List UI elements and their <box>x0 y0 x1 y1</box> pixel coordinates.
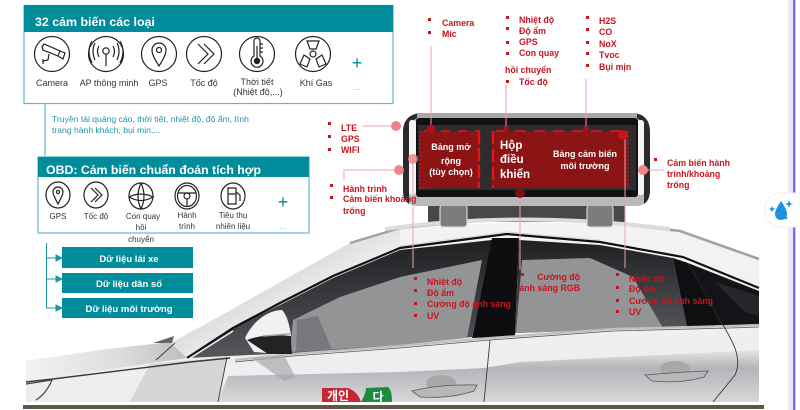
belt line <box>235 325 759 360</box>
icon: GPS pin <box>142 36 176 72</box>
A pillar <box>172 228 400 358</box>
OBD labels: Tốc độ <box>84 212 109 221</box>
icon: gas radiation <box>296 36 330 72</box>
icon: speed <box>84 182 108 208</box>
callout: window right: Cường độ ánh sáng <box>629 296 713 306</box>
car body <box>26 222 759 402</box>
callout: environment list: hồi chuyển <box>505 65 551 75</box>
callout: trip and distance left: Cảm biến khoảng <box>343 194 416 204</box>
OBD labels: GPS <box>50 212 66 221</box>
icon: camera <box>34 36 70 72</box>
wiper <box>153 336 174 343</box>
callout: connectivity: LTE <box>341 123 357 133</box>
callout: trip and distance left <box>330 184 416 216</box>
callout: gas list: CO <box>599 27 612 37</box>
display panel: expansion: rộng <box>441 156 461 166</box>
callout: gas list: NoX <box>599 39 617 49</box>
door seams <box>156 325 738 402</box>
callout: window right: Nhiệt độ <box>629 274 665 284</box>
callout: camera mic <box>428 18 474 39</box>
callout: environment list: Con quay <box>519 48 559 58</box>
taxi logo: 다 <box>372 389 384 404</box>
OBD labels: hồi <box>136 223 147 232</box>
callout: trip and distance left: Hành trình <box>343 184 387 194</box>
callout: trip and distance right: trống <box>667 180 689 190</box>
description text: Truyền tải quảng cáo, thời tiết, nhiệt độ, độ ẩm, tình <box>52 114 249 124</box>
panel: 32 sensors <box>24 5 393 104</box>
icon: GPS <box>46 182 70 208</box>
callout: window left: Nhiệt độ <box>427 277 463 287</box>
icon: thermometer <box>240 36 274 72</box>
display panel: expansion: (tùy chọn) <box>429 167 473 177</box>
plus more: + <box>352 53 362 73</box>
taxi logo <box>322 387 392 404</box>
rear window <box>515 240 687 333</box>
icon: gyroscope <box>129 183 153 209</box>
plus more: + <box>278 192 288 212</box>
display panel: controller and environment sensors: Hộp <box>500 140 522 152</box>
callout: trip and distance right <box>654 158 730 190</box>
OBD labels: trình <box>179 222 195 231</box>
OBD labels: Tiêu thụ <box>219 211 247 220</box>
panel heading: 32 cảm biến các loại <box>35 15 155 29</box>
B pillar <box>472 238 519 338</box>
callout: trip and distance right: Cảm biến hành <box>667 158 730 168</box>
OBD labels: Hành <box>177 211 197 220</box>
icon labels: Camera <box>36 78 68 88</box>
description text: trạng hành khách, bụi mịn,... <box>52 125 160 135</box>
data bar: driving <box>62 247 193 268</box>
icon labels: (Nhiệt độ,...) <box>233 87 283 97</box>
rear door handle <box>645 361 708 382</box>
icon labels: Thời tiết <box>241 77 274 87</box>
icon: steering wheel <box>175 183 199 209</box>
panel: OBD <box>38 157 309 244</box>
mirror shadow <box>252 355 296 381</box>
callout: window right: Độ ẩm <box>629 284 656 294</box>
device mounts <box>385 205 670 231</box>
rear window grey reflection <box>516 258 663 333</box>
display panel: controller and environment sensors: môi trường <box>561 161 609 171</box>
icon: speed <box>186 36 222 72</box>
OBD heading: OBD: Cảm biến chuẩn đoán tích hợp <box>46 163 261 177</box>
icon labels: Tốc độ <box>190 78 218 88</box>
callout: environment list: Tốc độ <box>519 77 548 87</box>
quarter window <box>688 263 759 325</box>
description text <box>52 114 249 135</box>
data bar: environment: Dữ liệu môi trường <box>85 304 173 315</box>
callout: environment list <box>505 15 559 87</box>
icon labels: AP thông minh <box>80 78 138 88</box>
data bar: population <box>62 273 193 293</box>
mirror <box>245 310 292 354</box>
hood shading <box>26 342 187 382</box>
callout: gas list: H2S <box>599 16 616 26</box>
seat shadow <box>296 316 332 352</box>
callout: window centre <box>519 272 581 293</box>
display panel: controller and environment sensors: Bảng cảm biến <box>553 149 617 159</box>
roof display device <box>385 113 670 231</box>
callout: gas list: Bụi mịn <box>599 62 631 72</box>
panel heading <box>24 5 393 32</box>
taxi logo: 개인 <box>327 389 349 403</box>
connector arrows to data bars <box>46 243 62 311</box>
callout: window right: UV <box>629 307 641 317</box>
display panel: controller and environment sensors <box>492 131 628 188</box>
callout: window left: Cường độ ánh sáng <box>427 299 511 309</box>
display panel: controller and environment sensors: khiển <box>500 169 530 181</box>
data bar: driving: Dữ liệu lái xe <box>99 254 159 265</box>
OBD heading <box>38 157 309 177</box>
callout lines and dots <box>344 46 664 270</box>
display panel: controller and environment sensors: điều <box>500 154 524 166</box>
callout: connectivity: WIFI <box>341 145 360 155</box>
OBD labels: Con quay <box>126 212 160 221</box>
callout: window left: Độ ẩm <box>427 288 454 298</box>
front window <box>187 240 492 358</box>
icon: fuel <box>221 183 245 209</box>
data bar: environment <box>62 298 193 318</box>
right edge scroll strip <box>788 0 795 410</box>
OBD labels: nhiên liệu <box>216 222 250 231</box>
hood line and headlamp <box>26 358 230 382</box>
plus more: ... <box>354 83 360 92</box>
connector: panel to OBD <box>44 103 46 157</box>
callout: gas list <box>586 16 631 72</box>
car illustration <box>26 222 759 404</box>
callout: environment list: Độ ẩm <box>519 26 546 36</box>
window chrome <box>187 234 759 358</box>
plus more <box>352 53 362 92</box>
callout: window centre: Cường độ <box>537 272 581 282</box>
icon labels <box>36 77 333 97</box>
callout: window left: UV <box>427 311 439 321</box>
callout: camera mic: Mic <box>442 29 457 39</box>
callout: camera mic: Camera <box>442 18 474 28</box>
bottom dark strip <box>23 405 764 409</box>
icon: smart AP <box>88 36 124 72</box>
plus more <box>278 192 288 231</box>
OBD labels: chuyển <box>128 235 154 244</box>
callout: connectivity: GPS <box>341 134 360 144</box>
door shading <box>218 350 759 402</box>
callout: connectivity <box>328 122 360 155</box>
C pillar <box>673 258 722 327</box>
icon labels: GPS <box>148 78 168 88</box>
callout: window centre: ánh sáng RGB <box>519 283 580 293</box>
front door handle <box>412 375 477 397</box>
icon: droplet widget <box>765 193 800 227</box>
display panel: expansion <box>420 131 480 188</box>
callout: window right <box>616 273 713 317</box>
callout: environment list: Nhiệt độ <box>519 15 555 25</box>
icon labels: Khí Gas <box>300 78 333 88</box>
OBD labels <box>50 211 250 244</box>
data bar: population: Dữ liệu dân số <box>96 279 162 290</box>
device housing <box>403 113 650 206</box>
front window grey reflection <box>290 260 482 352</box>
callout: gas list: Tvoc <box>599 50 620 60</box>
plus more: ... <box>280 222 286 231</box>
callout: environment list: GPS <box>519 37 538 47</box>
callout: trip and distance left: trống <box>343 206 365 216</box>
callout: trip and distance right: trình/khoảng <box>667 169 720 179</box>
display panel: expansion: Bảng mở <box>431 142 471 152</box>
callout: window left <box>414 277 511 321</box>
roof rail <box>350 224 440 243</box>
